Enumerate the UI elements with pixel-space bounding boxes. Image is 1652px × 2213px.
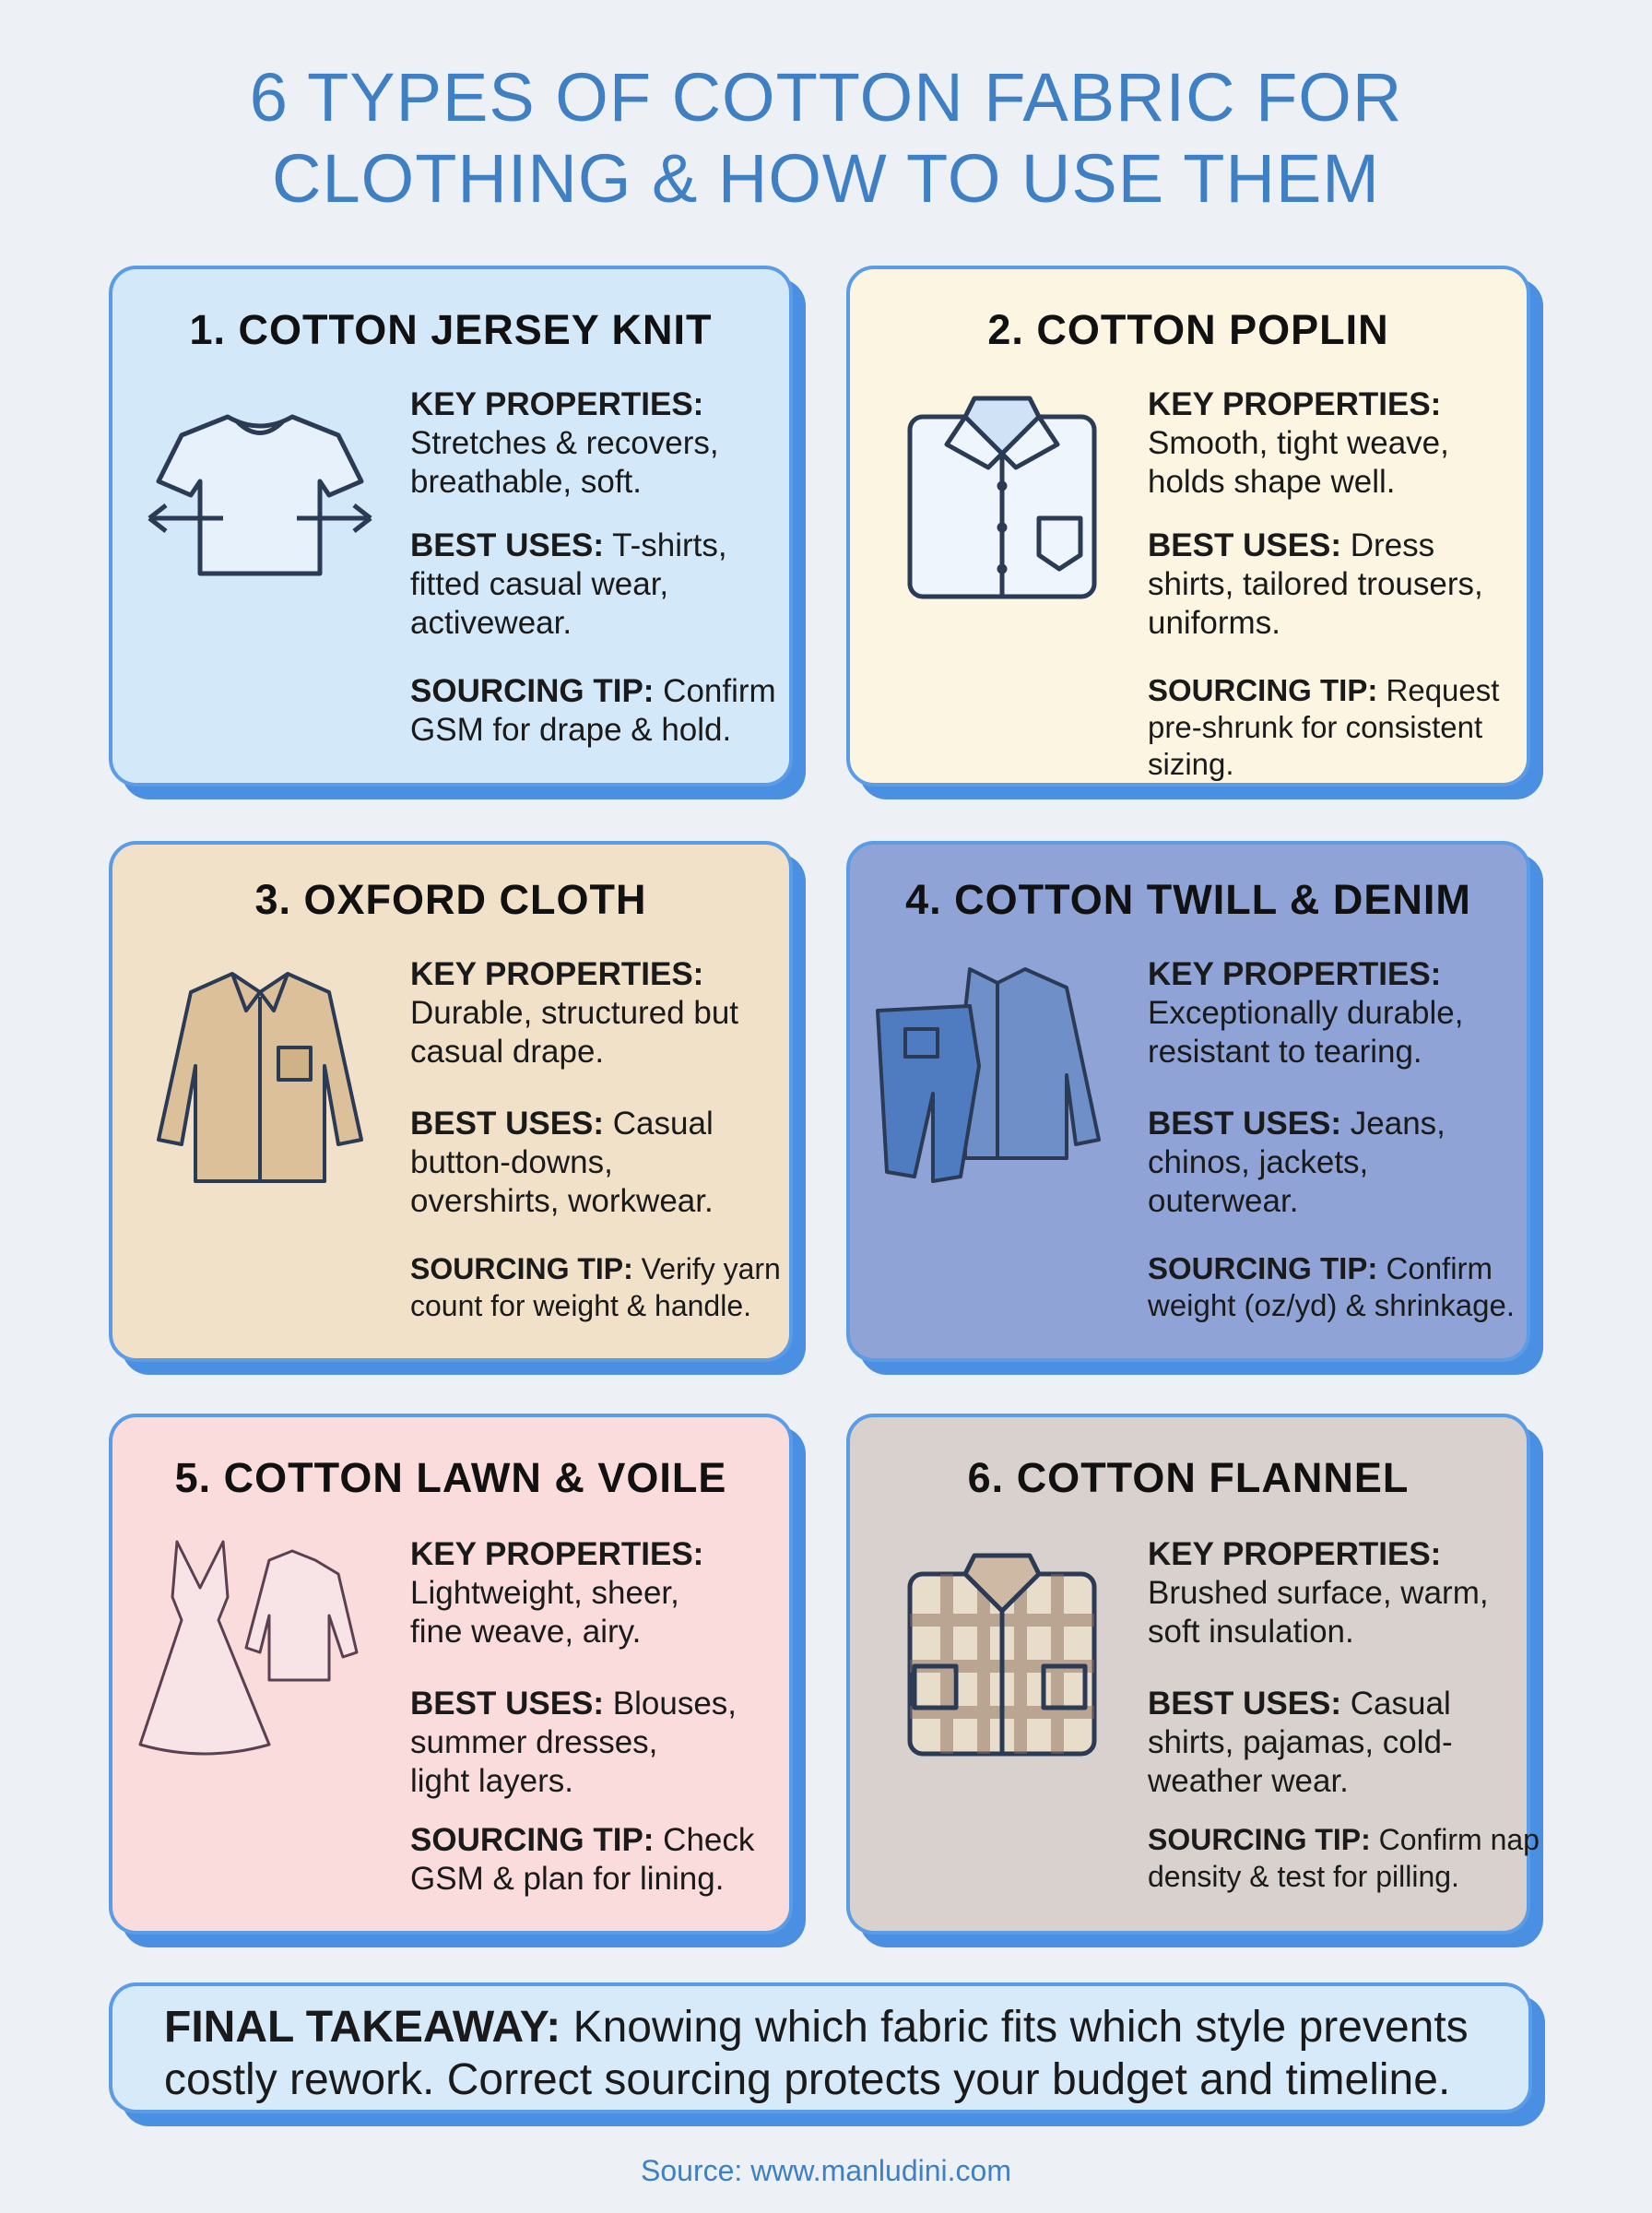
text: key properties: resistant to tearing. (1148, 1034, 1422, 1070)
text: key properties (410, 1536, 703, 1650)
source text: Source: www.manludini.com (641, 2154, 1011, 2187)
text: best uses: shirts, tailored trousers, (1148, 566, 1483, 602)
heading: 5. COTTON LAWN & VOILE (175, 1454, 726, 1501)
text: best uses: fitted casual wear, (410, 566, 668, 602)
text: best uses: BEST USES: T-shirts, (410, 527, 727, 563)
text: key properties: Exceptionally durable, (1148, 995, 1463, 1031)
text: best uses: weather wear. (1148, 1763, 1349, 1799)
panel: cotton twill & denim (846, 841, 1530, 1362)
text: sourcing tip: GSM & plan for lining. (410, 1861, 724, 1897)
text: best uses: BEST USES: Casual (410, 1106, 714, 1142)
text: key properties (1148, 956, 1463, 1070)
text: best uses (1148, 1106, 1446, 1219)
text: best uses: activewear. (410, 605, 572, 641)
heading: 6. COTTON FLANNEL (968, 1454, 1409, 1501)
text: sourcing tip (1148, 1823, 1540, 1893)
text: key properties (410, 956, 738, 1070)
panel: cotton flannel (846, 1414, 1530, 1935)
text: best uses: BEST USES: Casual (1148, 1686, 1451, 1722)
icon: dress and blouse (138, 1540, 358, 1756)
text: sourcing tip: SOURCING TIP: Check (410, 1822, 754, 1858)
text: best uses (410, 1686, 737, 1799)
text: sourcing tip: count for weight & handle. (410, 1289, 751, 1322)
text: best uses: BEST USES: Dress (1148, 527, 1434, 563)
heading: 1. COTTON JERSEY KNIT (190, 306, 712, 353)
text: key properties: Durable, structured but (410, 995, 738, 1031)
text: sourcing tip (410, 1252, 781, 1322)
text: sourcing tip: pre-shrunk for consistent (1148, 710, 1482, 744)
text: key properties: soft insulation. (1148, 1614, 1354, 1650)
panel: cotton jersey knit (109, 266, 793, 787)
text: sourcing tip: weight (oz/yd) & shrinkage. (1148, 1288, 1515, 1322)
icon: plaid folded shirt (907, 1553, 1097, 1756)
text: sourcing tip: SOURCING TIP: Confirm (410, 673, 776, 709)
panel: oxford cloth (109, 841, 793, 1362)
text: best uses: overshirts, workwear. (410, 1183, 714, 1219)
text: best uses: BEST USES: Blouses, (410, 1686, 737, 1722)
text: sourcing tip: SOURCING TIP: Confirm (1148, 1251, 1493, 1285)
text: sourcing tip (410, 673, 776, 748)
title (250, 59, 1402, 217)
text: best uses (1148, 527, 1483, 641)
heading: 2. COTTON POPLIN (987, 306, 1389, 353)
text: key properties: breathable, soft. (410, 464, 642, 500)
text: sourcing tip (1148, 1251, 1515, 1322)
text: sourcing tip (1148, 673, 1499, 781)
panel: cotton lawn & voile (109, 1414, 793, 1935)
text: key properties: KEY PROPERTIES: (410, 956, 703, 992)
text: key properties: fine weave, airy. (410, 1614, 641, 1650)
heading: 4. COTTON TWILL & DENIM (905, 876, 1471, 923)
text: key properties: holds shape well. (1148, 464, 1396, 500)
text: key properties: Stretches & recovers, (410, 425, 719, 461)
callout: final takeaway (109, 1982, 1532, 2113)
text: key properties: KEY PROPERTIES: (410, 1536, 703, 1572)
title: CLOTHING & HOW TO USE THEM (272, 140, 1380, 217)
text: key properties (1148, 386, 1449, 500)
text: best uses: shirts, pajamas, cold- (1148, 1724, 1453, 1760)
text: key properties (410, 386, 719, 500)
text: best uses: summer dresses, (410, 1724, 657, 1760)
text: sourcing tip: SOURCING TIP: Confirm nap (1148, 1823, 1540, 1856)
text: key properties: Smooth, tight weave, (1148, 425, 1449, 461)
text: key properties: KEY PROPERTIES: (1148, 386, 1441, 422)
icon: t-shirt with arrows (148, 415, 372, 575)
text: sourcing tip: SOURCING TIP: Request (1148, 673, 1499, 707)
heading: 3. OXFORD CLOTH (254, 876, 647, 923)
icon: jeans and denim jacket (876, 967, 1101, 1183)
text: key properties: KEY PROPERTIES: (1148, 1536, 1441, 1572)
text: key properties: Brushed surface, warm, (1148, 1575, 1489, 1611)
text: best uses: button-downs, (410, 1144, 613, 1180)
text: sourcing tip (410, 1822, 754, 1897)
text: key properties (1148, 1536, 1489, 1650)
text: key properties: KEY PROPERTIES: (410, 386, 703, 422)
text: key properties: Lightweight, sheer, (410, 1575, 679, 1611)
text: key properties: KEY PROPERTIES: (1148, 956, 1441, 992)
text: key properties: casual drape. (410, 1034, 604, 1070)
text: best uses (1148, 1686, 1453, 1799)
panel: cotton poplin (846, 266, 1530, 787)
text: best uses (410, 1106, 714, 1219)
title: 6 TYPES OF COTTON FABRIC FOR (250, 59, 1402, 136)
icon: oxford shirt (157, 972, 363, 1183)
text: sourcing tip: density & test for pilling. (1148, 1860, 1459, 1893)
text: sourcing tip: SOURCING TIP: Verify yarn (410, 1252, 781, 1285)
text: best uses: uniforms. (1148, 605, 1280, 641)
text: sourcing tip: sizing. (1148, 747, 1234, 781)
icon: dress shirt (907, 396, 1097, 599)
text: best uses: outerwear. (1148, 1183, 1298, 1219)
text: best uses (410, 527, 727, 641)
text: best uses: BEST USES: Jeans, (1148, 1106, 1446, 1142)
callout: final takeaway: FINAL TAKEAWAY: Knowing which fabric fits which style prevents (164, 2003, 1469, 2052)
text: best uses: chinos, jackets, (1148, 1144, 1368, 1180)
callout: final takeaway: costly rework. Correct sourcing protects your budget and timeline. (164, 2055, 1450, 2104)
text: sourcing tip: GSM for drape & hold. (410, 712, 731, 748)
text: best uses: light layers. (410, 1763, 573, 1799)
